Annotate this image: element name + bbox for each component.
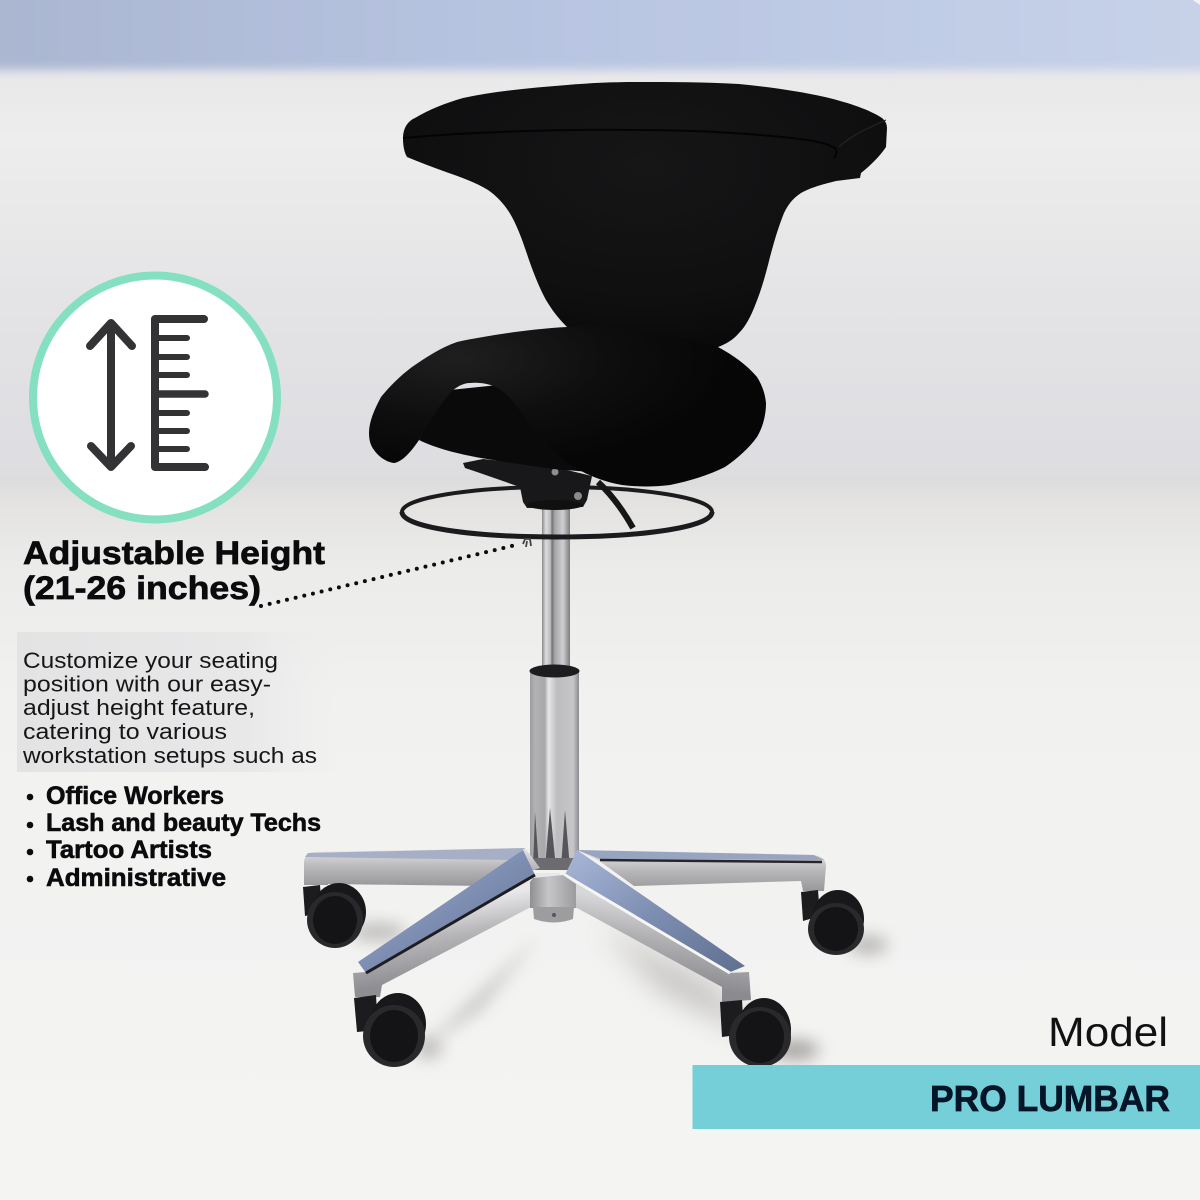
base: rear left arm <box>304 848 540 886</box>
chair floor shadows <box>350 923 888 1060</box>
icon: ruler <box>155 319 205 467</box>
backrest seam <box>403 130 837 158</box>
model label: Model <box>1048 1009 1168 1055</box>
base: front left arm <box>353 850 560 997</box>
description text: workstation setups such as <box>22 743 317 768</box>
callout: dotted leader line from heading to footrest ring <box>261 539 531 606</box>
footrest ring, front half <box>402 512 712 537</box>
base hub <box>530 875 576 922</box>
seat <box>369 327 766 486</box>
base: rear right arm <box>577 850 826 891</box>
icon: adjustable height in mint-ringed circle <box>33 276 277 520</box>
caster: front right <box>720 998 791 1067</box>
caster: rear right <box>801 890 864 955</box>
cylinder <box>530 664 580 870</box>
heading: adjustable height: (21-26 inches) <box>23 570 261 606</box>
chair <box>303 82 887 1067</box>
description text: adjust height feature, <box>23 695 255 720</box>
heading: adjustable height: Adjustable Height <box>23 535 325 571</box>
description text: Customize your seating <box>23 648 278 673</box>
bullet list of professions: Tartoo Artists <box>46 836 212 864</box>
cable <box>598 482 633 528</box>
description text: catering to various <box>23 719 227 744</box>
description panel <box>17 632 342 772</box>
heading: adjustable height <box>23 535 325 606</box>
footrest ring, back half <box>402 487 712 512</box>
bullet list of professions <box>27 782 321 892</box>
bullet list of professions: Administrative <box>46 864 226 892</box>
caster: front left <box>354 993 426 1067</box>
caster: rear left <box>303 883 366 948</box>
base: front right arm <box>550 850 751 1002</box>
bullet list of professions: Lash and beauty Techs <box>46 809 321 837</box>
seat mechanism <box>463 459 592 510</box>
bullet list of professions: Office Workers <box>46 782 224 810</box>
description text: position with our easy- <box>23 672 271 696</box>
model name banner: PRO LUMBAR <box>930 1078 1170 1119</box>
backrest <box>403 82 887 362</box>
gas lift pole <box>542 505 570 671</box>
model name banner <box>692 1065 1200 1129</box>
description text <box>22 648 317 768</box>
icon: double arrow <box>90 323 132 467</box>
